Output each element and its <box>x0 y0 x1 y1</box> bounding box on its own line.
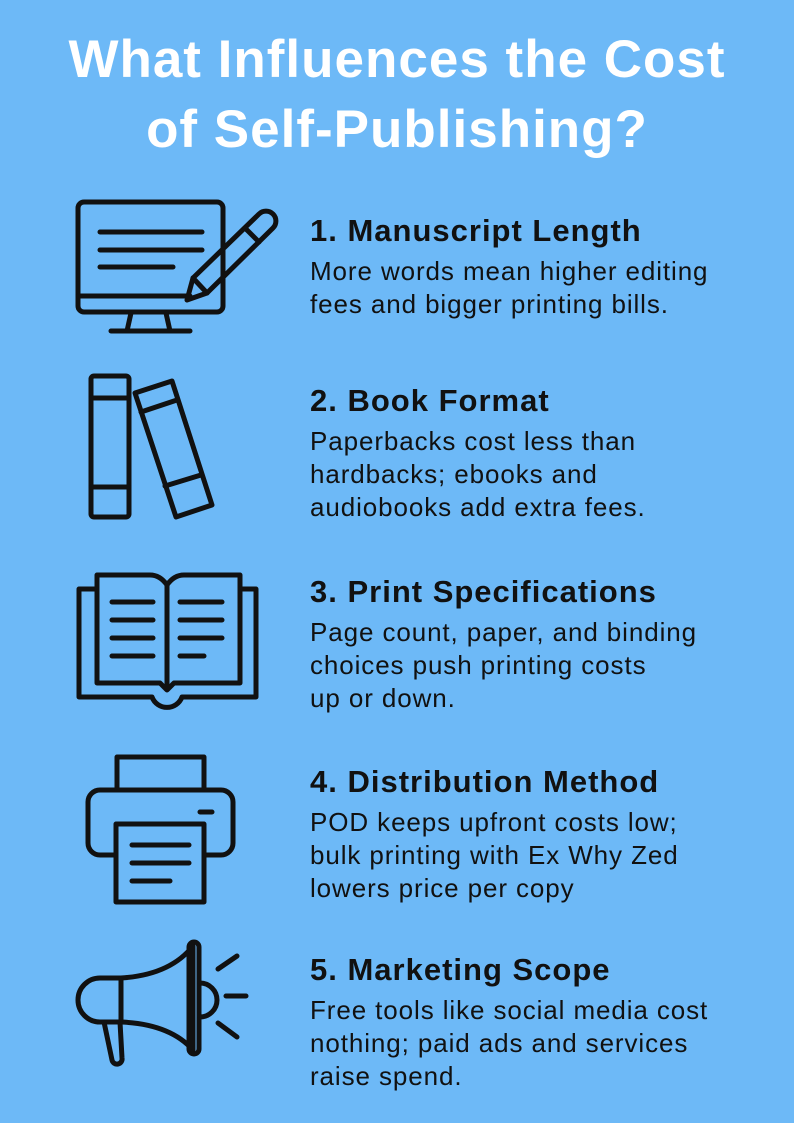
item 4: POD keeps upfront costs low; <box>310 807 678 837</box>
item 2: Paperbacks cost less than <box>310 426 636 456</box>
item 5: 5. Marketing Scope <box>310 952 611 987</box>
icon: monitor with pencil <box>78 202 276 331</box>
icon: books <box>91 376 212 517</box>
icon: open book <box>79 575 256 707</box>
item 4: 4. Distribution Method <box>310 764 659 799</box>
item 2: 2. Book Format <box>310 383 550 418</box>
item 4: bulk printing with Ex Why Zed <box>310 840 679 870</box>
item 2: hardbacks; ebooks and <box>310 459 598 489</box>
item 1: More words mean higher editing <box>310 256 708 286</box>
item 2: audiobooks add extra fees. <box>310 492 646 522</box>
item 5 <box>310 952 708 1091</box>
title: of Self-Publishing? <box>146 100 648 159</box>
title <box>68 30 726 159</box>
icon: printer <box>88 757 233 902</box>
item 3: 3. Print Specifications <box>310 574 657 609</box>
item 3: Page count, paper, and binding <box>310 617 697 647</box>
item 5: nothing; paid ads and services <box>310 1028 688 1058</box>
item 3: up or down. <box>310 683 456 713</box>
item 4: lowers price per copy <box>310 873 575 903</box>
item 5: Free tools like social media cost <box>310 995 708 1025</box>
item 3: choices push printing costs <box>310 650 646 680</box>
icon: megaphone <box>78 942 246 1064</box>
item 4 <box>310 764 679 903</box>
item 1 <box>310 213 708 319</box>
item 5: raise spend. <box>310 1061 462 1091</box>
item 3 <box>310 574 697 713</box>
title: What Influences the Cost <box>68 30 726 89</box>
item 2 <box>310 383 646 522</box>
item 1: 1. Manuscript Length <box>310 213 642 248</box>
item 1: fees and bigger printing bills. <box>310 289 669 319</box>
